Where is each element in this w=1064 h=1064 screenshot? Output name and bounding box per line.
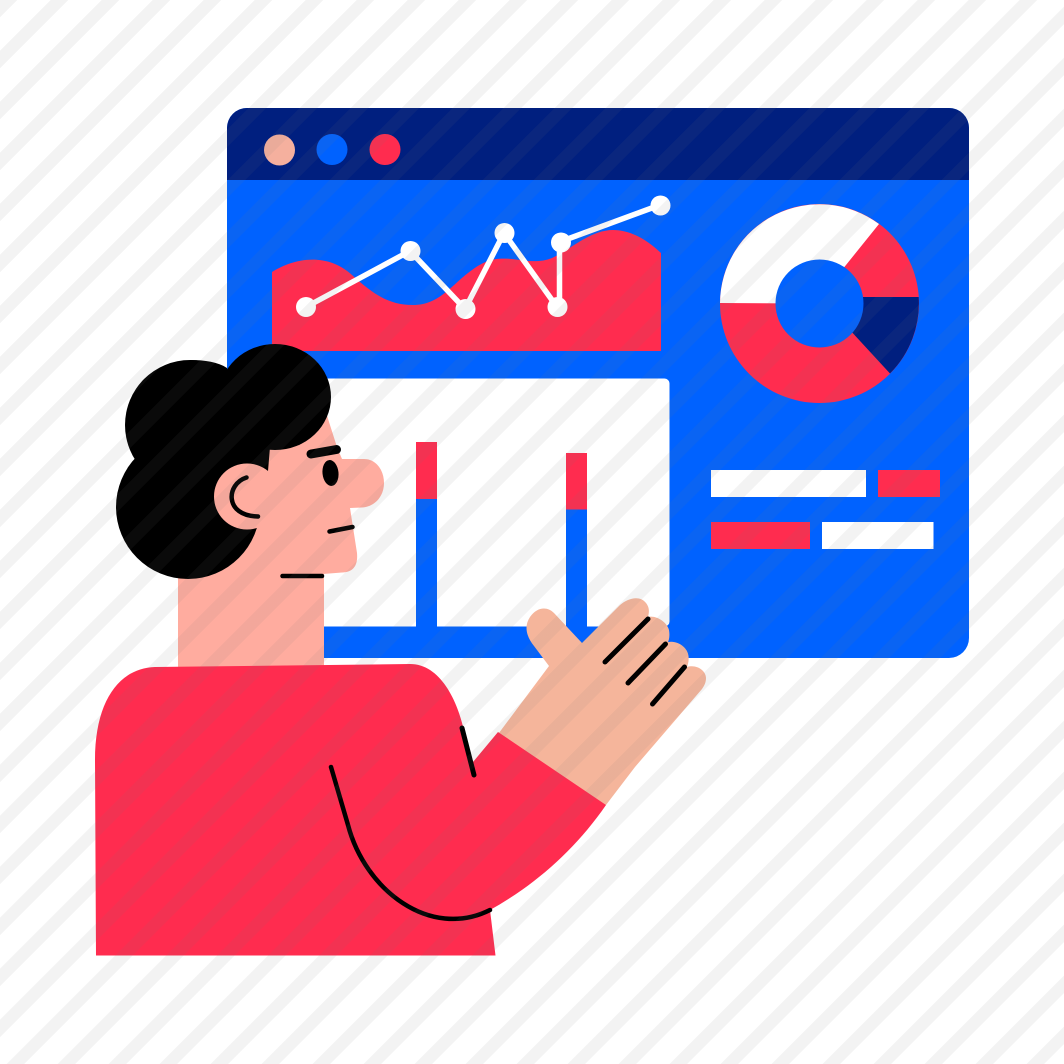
neck: [178, 540, 324, 670]
mouth: [330, 527, 352, 532]
person: [95, 344, 706, 956]
finger lines: [605, 619, 684, 704]
eye: [321, 459, 340, 487]
donut chart: [720, 204, 919, 403]
trend points: [296, 196, 670, 319]
white trend line: [306, 205, 660, 309]
ear inner line: [232, 478, 258, 516]
bar one: [416, 442, 437, 627]
browser window panel: [227, 108, 969, 658]
area and line chart: [272, 196, 670, 351]
bar two: [566, 453, 587, 627]
hair: [116, 344, 331, 579]
bar chart panel: [272, 378, 670, 627]
white segment: [720, 204, 879, 304]
dark segment: [820, 297, 919, 374]
chin line: [282, 574, 322, 578]
eyebrow: [311, 450, 336, 454]
window title bar: [227, 108, 969, 180]
red area: [272, 230, 661, 351]
arm outline: [331, 767, 490, 919]
sleeve crease: [462, 728, 474, 775]
face: [230, 400, 384, 590]
hand: [490, 598, 706, 805]
donut hole: [776, 260, 864, 348]
legend blocks: [711, 470, 940, 549]
window control dots: [264, 134, 400, 166]
ear: [214, 464, 280, 530]
shirt: [95, 664, 606, 956]
